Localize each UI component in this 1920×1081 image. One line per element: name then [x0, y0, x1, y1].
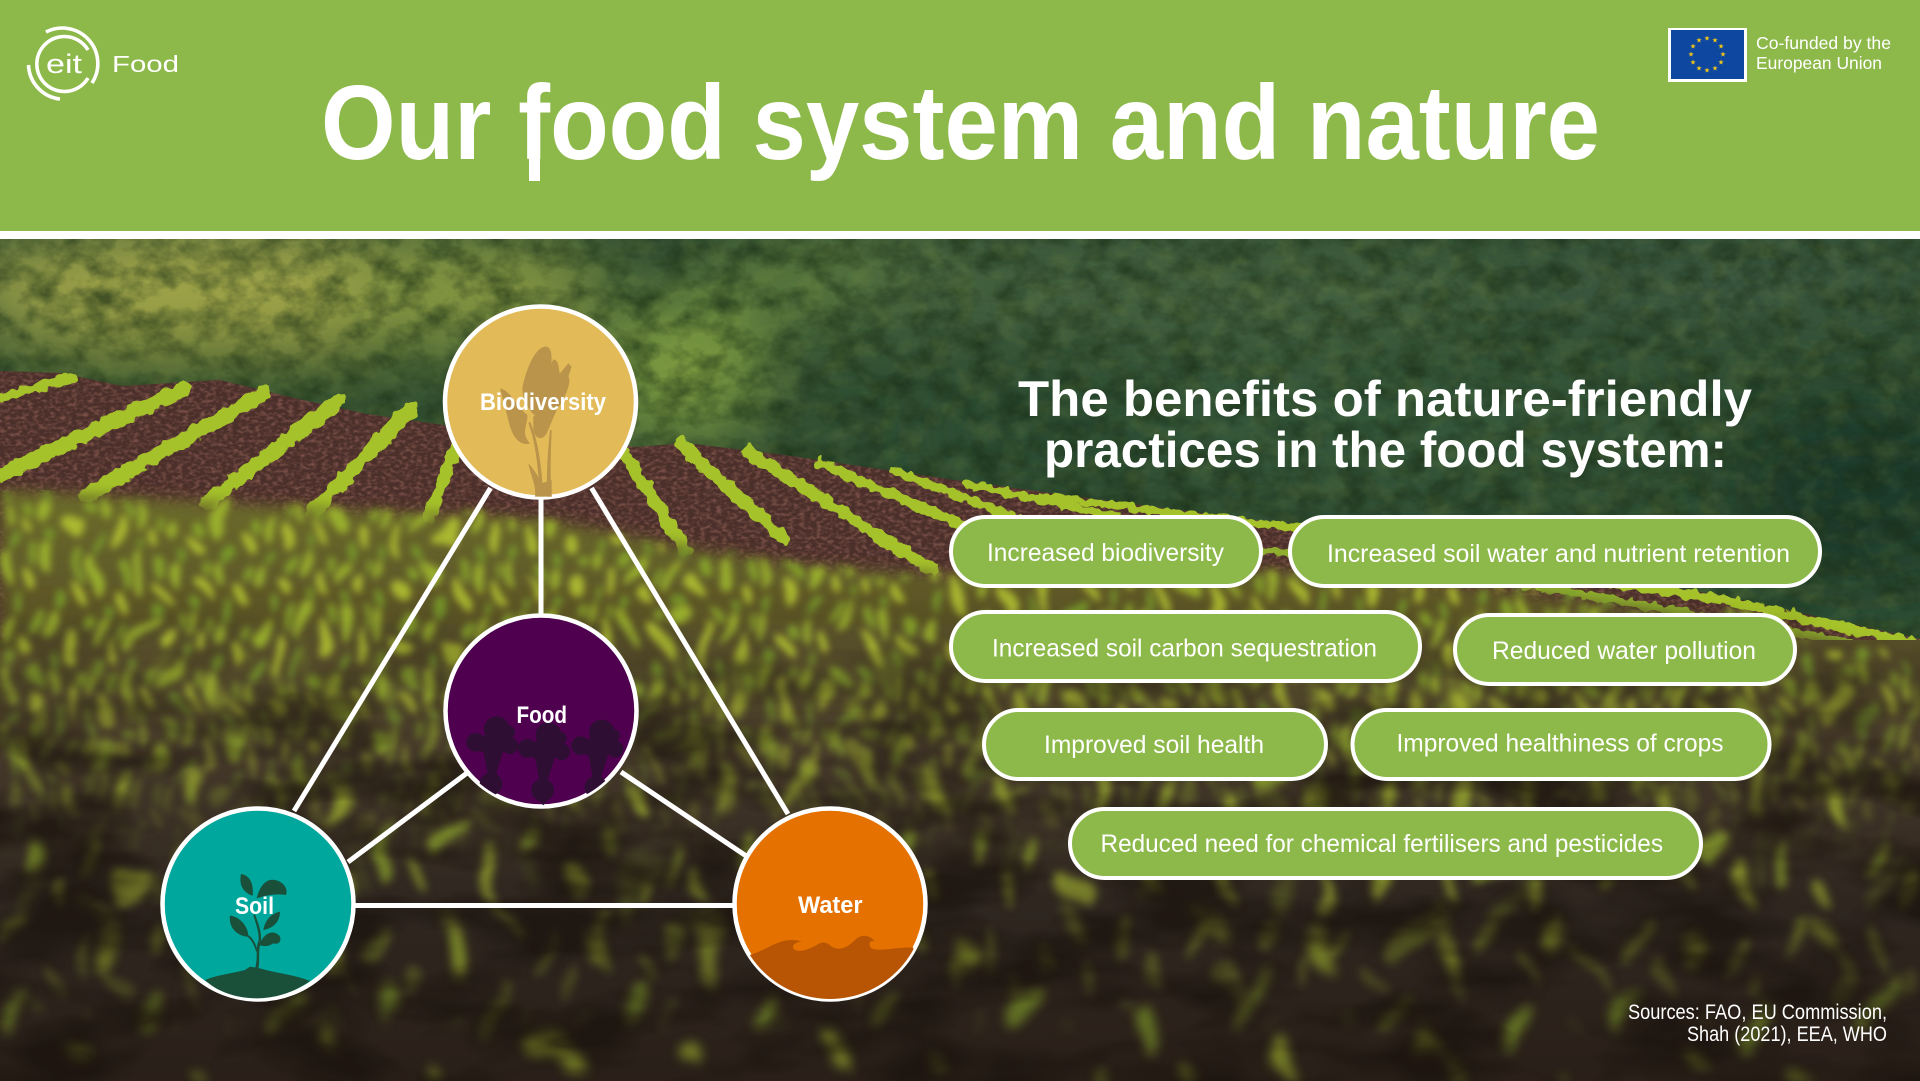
EU co-funded emblem: European Union [1756, 53, 1882, 73]
sources note: Shah (2021), EEA, WHO [1687, 1023, 1887, 1046]
EU flag: ★ [1718, 58, 1724, 66]
sources note [1628, 1001, 1887, 1046]
pill: Reduced water pollution: Reduced water pollution [1492, 637, 1756, 665]
circle: Food [446, 616, 636, 806]
background photo: forest and crop field [0, 225, 1920, 1081]
EU flag: ★ [1720, 50, 1726, 58]
circle: Water: Water [798, 892, 862, 919]
icon: waves [750, 936, 913, 1005]
EU flag: ★ [1690, 42, 1696, 50]
EU flag: ★ [1712, 64, 1718, 72]
header band [0, 0, 1920, 231]
EU flag: ★ [1704, 34, 1710, 42]
EU flag: ★ [1690, 58, 1696, 66]
EU flag: ★ [1696, 36, 1702, 44]
pill: Reduced need for chemical fertilisers and pesticides [1070, 809, 1701, 878]
logo: EIT Food: Food [112, 51, 179, 77]
EU flag: ★ [1718, 42, 1724, 50]
sources note: Sources: FAO, EU Commission, [1628, 1001, 1887, 1024]
EU flag: ★ [1696, 64, 1702, 72]
ploughed soil on the hill [0, 371, 1920, 640]
seedlings: near horizon [0, 490, 1920, 860]
pill: Reduced water pollution [1455, 615, 1795, 684]
seedlings: foreground [0, 820, 1920, 1081]
pill: Increased biodiversity: Increased biodiversity [987, 539, 1224, 567]
circle: Biodiversity [445, 306, 636, 498]
pill: Improved soil health [984, 710, 1326, 779]
pill: Improved healthiness of crops [1352, 710, 1770, 779]
circle: Soil: Soil [235, 893, 274, 920]
pill: Increased biodiversity [951, 517, 1261, 586]
crop rows [0, 377, 1920, 655]
connecting lines between circles [294, 488, 788, 906]
blurred foreground field [0, 490, 1920, 1081]
seedlings: middle distance [0, 646, 1920, 1020]
logo: EIT Food [28, 28, 179, 99]
forest [0, 225, 1920, 659]
circle: Food: Food [516, 702, 567, 729]
circle: Water [734, 808, 926, 1005]
heading: benefits: practices in the food system: [1044, 422, 1727, 478]
EU flag [1668, 28, 1747, 82]
EU flag: ★ [1704, 66, 1710, 74]
icon: seedling in soil [205, 874, 310, 998]
heading: benefits: The benefits of nature-friendly [1018, 371, 1752, 427]
pill: Increased soil carbon sequestration [951, 612, 1420, 681]
dark soil patches [0, 600, 1920, 1081]
icon: beets [466, 716, 623, 805]
EU flag: ★ [1712, 36, 1718, 44]
circle: Soil [162, 808, 354, 1000]
pill: Improved soil health: Improved soil health [1044, 731, 1264, 759]
heading: benefits [1018, 371, 1752, 478]
EU flag: ★ [1688, 50, 1694, 58]
icon: wheat [500, 347, 572, 497]
pill: Improved healthiness of crops: Improved healthiness of crops [1396, 730, 1724, 758]
pill: Increased soil water and nutrient retention: Increased soil water and nutrient retention [1327, 540, 1790, 568]
EU co-funded emblem [1668, 28, 1891, 82]
EU co-funded emblem: Co-funded by the [1756, 33, 1891, 53]
circle: Biodiversity: Biodiversity [480, 389, 607, 416]
pill: Increased soil carbon sequestration: Increased soil carbon sequestration [992, 634, 1377, 662]
pill: Reduced need for chemical fertilisers and pesticides: Reduced need for chemical fertilisers and pesticides [1100, 830, 1663, 858]
logo: EIT Food: eit [46, 49, 83, 79]
title: Our food system and nature [321, 64, 1600, 182]
pill: Increased soil water and nutrient retention [1290, 517, 1820, 586]
